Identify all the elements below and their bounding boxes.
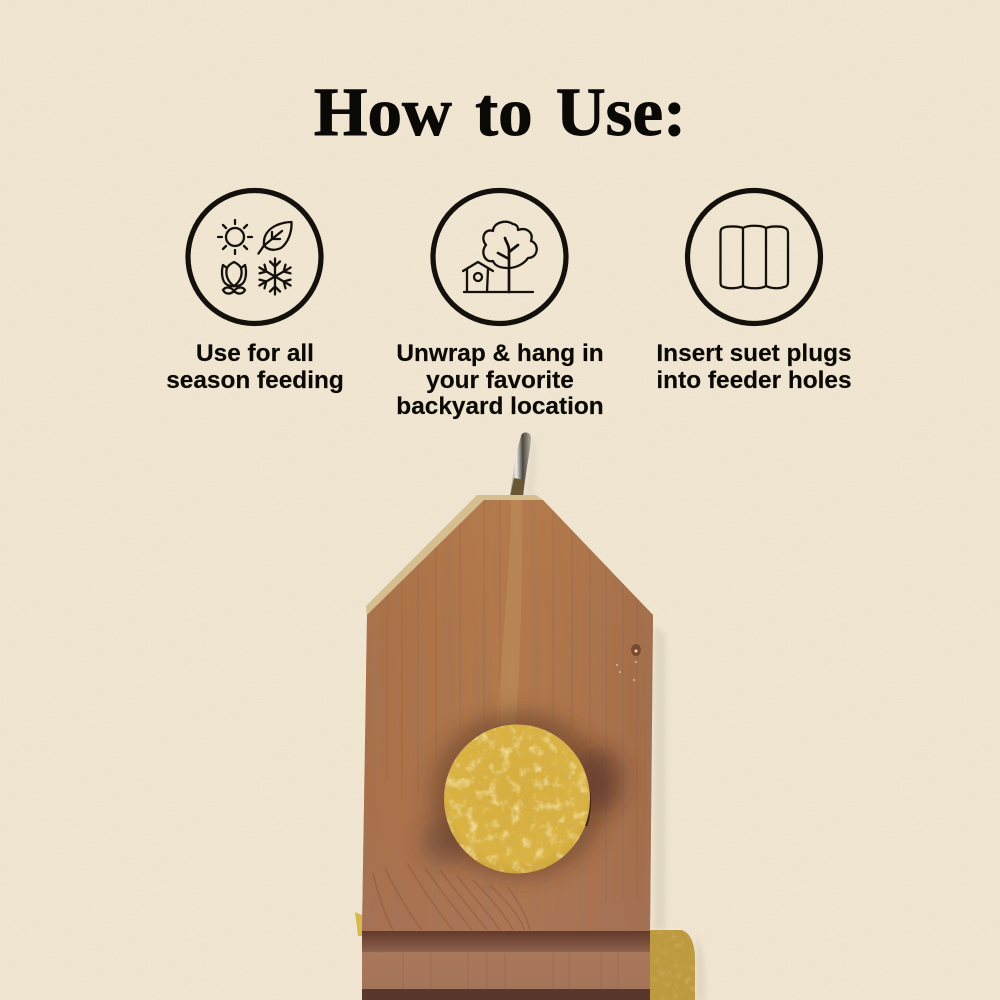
caption: unwrap and hang: [396, 340, 604, 420]
caption: unwrap and hang: your favorite: [426, 367, 574, 394]
center light stripe: [497, 500, 522, 725]
lower slats: [355, 912, 650, 1000]
icon: tree and birdhouse: [430, 188, 569, 326]
caption: insert suet plugs: into feeder holes: [656, 367, 852, 394]
feeder wood body: [355, 490, 660, 935]
knot: [631, 644, 641, 656]
hook: [510, 432, 536, 497]
feeder photo illustration: [355, 432, 706, 1000]
hole shadow: [431, 711, 607, 879]
caption: all season feeding: season feeding: [166, 367, 344, 394]
caption: all season feeding: [166, 340, 344, 394]
suet side piece: [650, 928, 705, 1000]
caption: unwrap and hang: Unwrap & hang in: [396, 340, 604, 367]
suet plug: [444, 724, 591, 874]
icon: suet plugs: [684, 188, 824, 326]
caption: unwrap and hang: backyard location: [396, 393, 604, 420]
caption: insert suet plugs: Insert suet plugs: [656, 340, 852, 367]
caption: all season feeding: Use for all: [196, 340, 314, 367]
feeder shadow: [654, 625, 665, 930]
icon: seasons: [185, 188, 324, 326]
caption: insert suet plugs: [656, 340, 852, 394]
title: How to Use:: [314, 74, 686, 150]
wood grain: [387, 500, 637, 900]
